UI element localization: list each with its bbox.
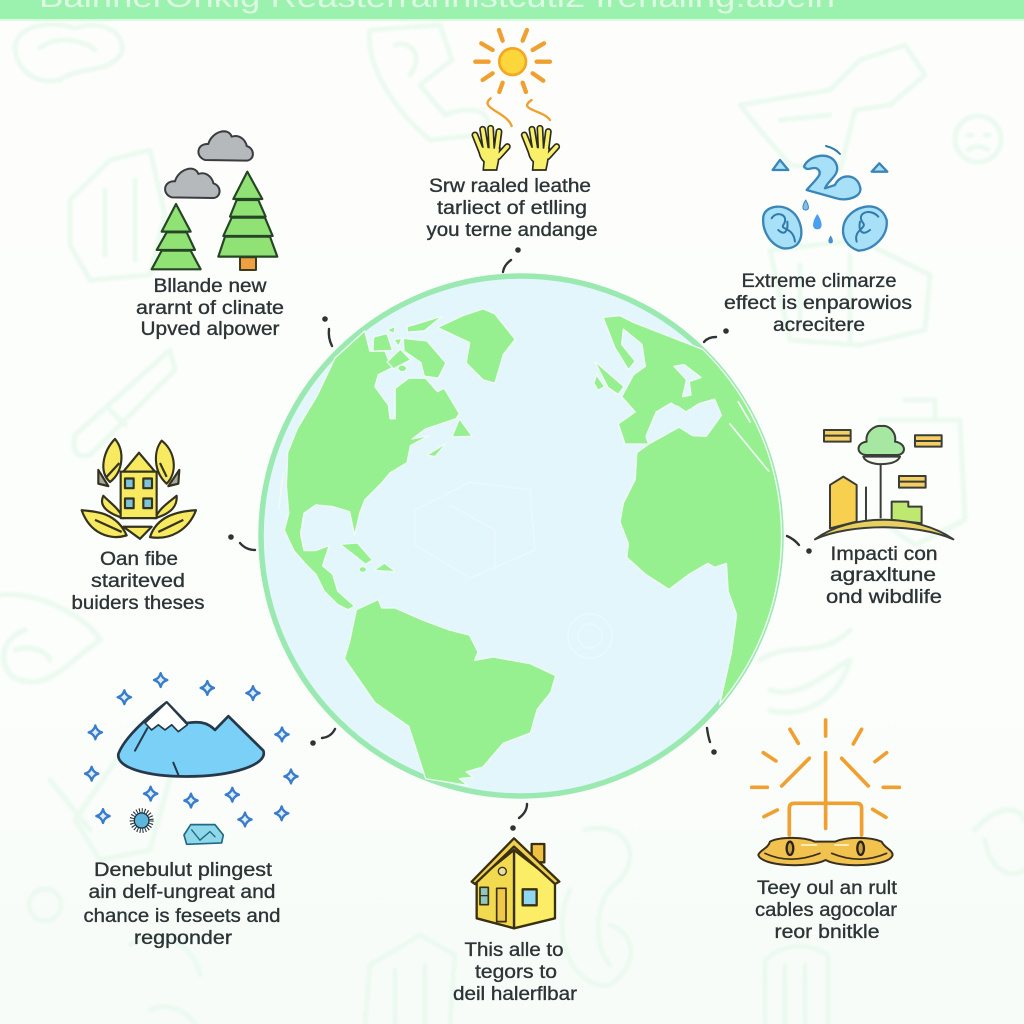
text: house caption: This alle to <box>464 939 564 961</box>
icon: sun and hands <box>475 30 557 170</box>
text: mountain caption: ain delf-ungreat and <box>88 881 276 903</box>
text: solar caption: Teey oul an rult <box>757 877 898 899</box>
panel: trees and clouds <box>136 131 284 340</box>
icon: blue swirls and drops <box>763 146 887 251</box>
text: solar caption <box>755 877 898 943</box>
text: solar caption: cables agocolar <box>755 899 898 921</box>
connector dots and curves <box>228 247 812 831</box>
continent: South America <box>344 600 556 785</box>
text: sun caption: Srw raaled leathe <box>429 175 591 197</box>
text: building caption: Oan fibe <box>100 548 178 570</box>
panel: agriculture and wildlife <box>815 426 953 608</box>
text: extreme weather caption: Extreme climarze <box>742 270 896 292</box>
text: trees caption <box>136 275 284 340</box>
text: building caption: buiders theses <box>72 592 205 614</box>
panel: building and leaves <box>72 439 205 614</box>
icon: radiating light and base <box>752 720 899 865</box>
panel: melting mountain <box>84 673 298 949</box>
text: extreme weather caption: effect is enparowios <box>724 292 912 314</box>
continent: Eurasia and Africa <box>603 316 782 704</box>
text: extreme weather caption: acrecitere <box>773 314 865 336</box>
text: trees caption: Upved alpower <box>140 318 280 340</box>
text: solar caption: reor bnitkle <box>774 921 880 943</box>
islands: Caribbean <box>340 543 395 572</box>
text: building caption: stariteved <box>91 570 185 592</box>
text: agriculture caption: Impacti con <box>830 543 938 565</box>
icon: leafy building <box>82 439 196 539</box>
text: building caption <box>72 548 205 614</box>
continent: North America <box>284 331 459 610</box>
icon: trees and clouds <box>152 131 277 270</box>
islands: United Kingdom and Ireland <box>594 361 624 394</box>
text: house caption <box>453 939 578 1005</box>
text: mountain caption: Denebulut plingest <box>94 859 273 881</box>
panel: sun and hands <box>426 30 598 241</box>
text: agriculture caption: agraxltune <box>830 564 936 586</box>
text: mountain caption: regponder <box>134 927 233 949</box>
text: mountain caption <box>84 859 280 949</box>
text: trees caption: ararnt of clinate <box>136 297 284 319</box>
sea: Mediterranean and Black Sea <box>646 365 721 444</box>
icon: left hand <box>475 128 507 170</box>
continent: Arctic islands <box>373 316 446 378</box>
icon: right hand <box>524 128 557 170</box>
panel: extreme weather <box>724 146 912 336</box>
text: extreme weather caption <box>724 270 912 336</box>
title banner <box>0 0 1024 21</box>
panel: house <box>453 838 578 1005</box>
icon: snowy mountain with sparkles <box>85 673 298 844</box>
text: mountain caption: chance is feseets and <box>84 905 280 927</box>
text: sun caption <box>426 175 598 241</box>
icon: yellow house <box>472 838 559 928</box>
panel: solar energy <box>752 720 899 943</box>
text: sun caption: tarliect of etlling <box>437 197 587 219</box>
text: agriculture caption <box>826 543 942 608</box>
continent: Greenland <box>437 309 515 383</box>
text: house caption: tegors to <box>475 961 557 983</box>
globe <box>261 276 782 796</box>
islands: Atlantic Canada <box>427 419 472 457</box>
text: agriculture caption: ond wibdlife <box>826 586 942 608</box>
text: house caption: deil halerflbar <box>453 983 578 1005</box>
icon: farm landscape <box>815 426 953 539</box>
text: sun caption: you terne andange <box>426 219 598 241</box>
text: trees caption: Bllande new <box>154 275 267 297</box>
